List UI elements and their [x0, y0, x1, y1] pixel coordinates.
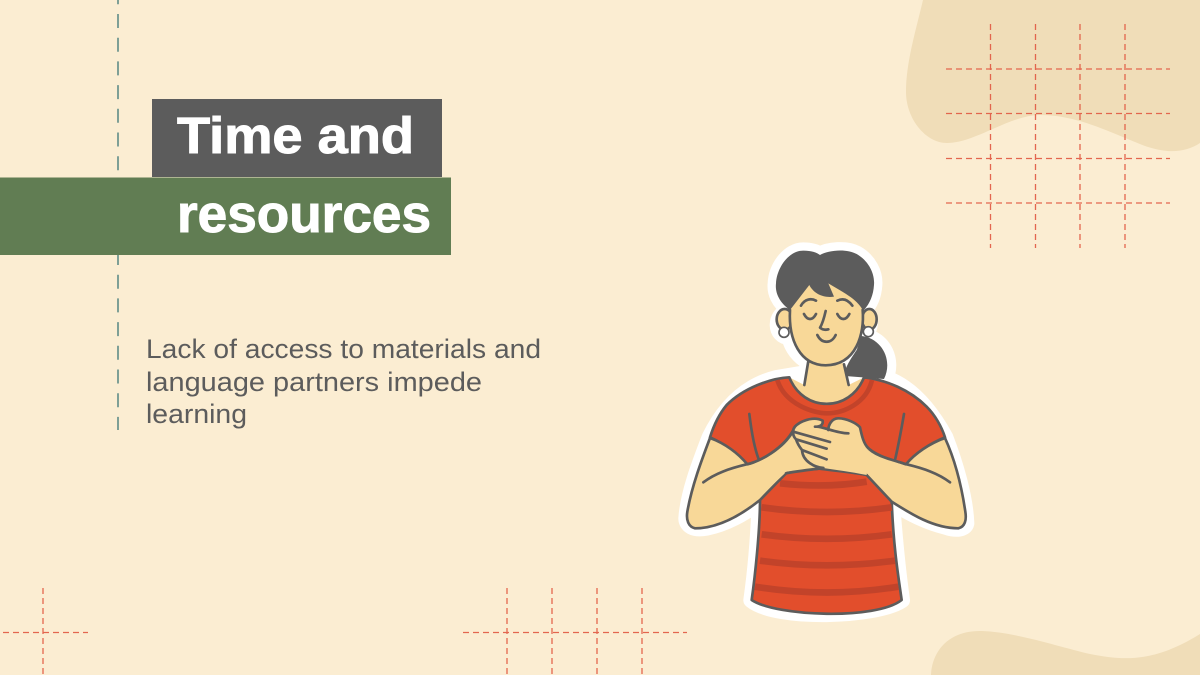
neck lines	[804, 361, 849, 385]
dashed grid: bottom centre	[463, 588, 687, 675]
arm creases	[703, 432, 950, 482]
hands	[793, 418, 868, 475]
shirt stripes	[755, 380, 898, 592]
ears and earrings	[777, 309, 877, 337]
sleeve seams	[749, 414, 904, 460]
title: resources: resources	[177, 185, 431, 244]
shirt	[710, 377, 945, 614]
dashed vertical line: left	[117, 0, 119, 430]
blob: top right background shape	[906, 0, 1200, 151]
title: Time and: Time and	[177, 107, 414, 164]
face	[790, 283, 863, 365]
blob: bottom right background shape	[931, 631, 1200, 675]
left arm	[687, 430, 823, 528]
body text: language partners impede	[146, 367, 482, 397]
eyebrows, eyes, nose, mouth	[801, 299, 852, 342]
illustration: woman with hands on chest	[687, 250, 966, 614]
covering arm overlap	[707, 427, 947, 497]
dashed grid: top right	[946, 24, 1170, 248]
neck	[789, 360, 864, 404]
hair	[776, 250, 874, 320]
body text: learning	[146, 399, 247, 429]
right arm	[817, 427, 966, 528]
title: Time and	[152, 99, 442, 177]
sticker: white outline	[687, 250, 966, 614]
body text: Lack of access to materials and	[146, 334, 541, 364]
dashed grid: bottom left	[3, 588, 88, 675]
body text	[146, 334, 541, 429]
title: resources	[0, 178, 451, 255]
ponytail	[845, 336, 887, 379]
